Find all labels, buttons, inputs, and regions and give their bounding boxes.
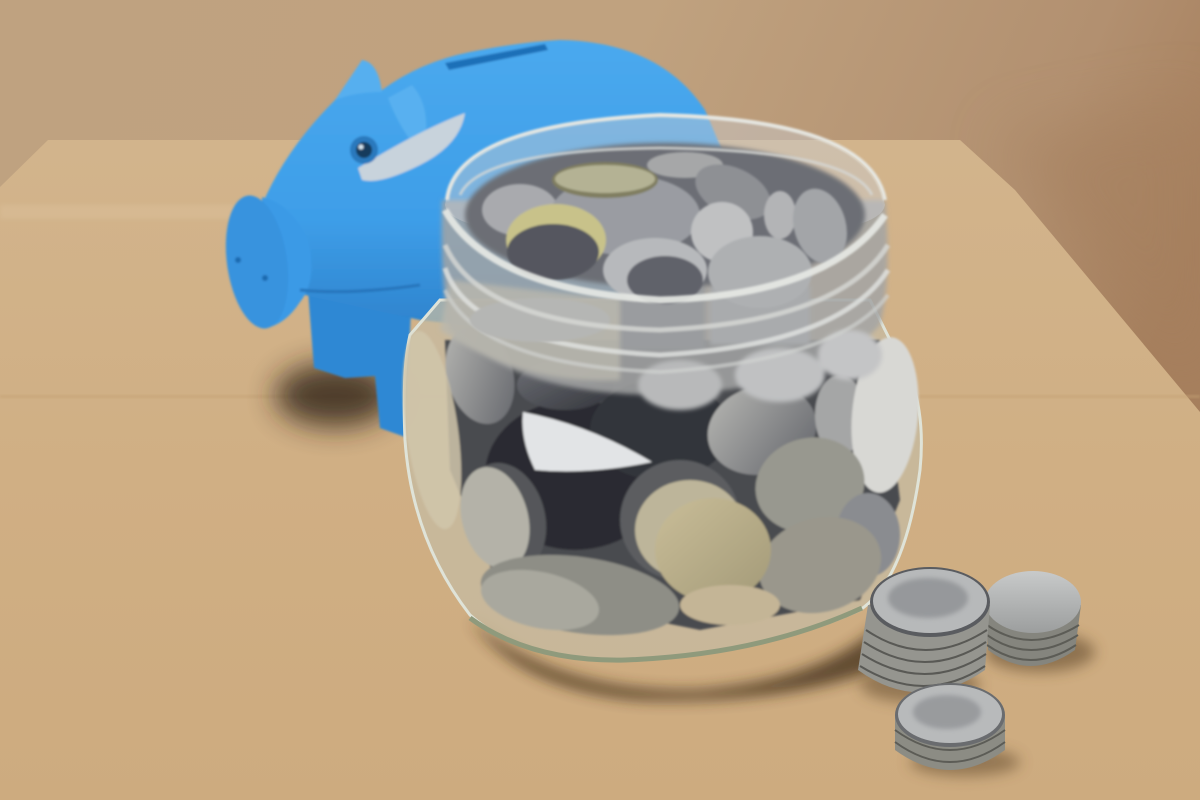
pig legs [308,290,412,437]
jar back rim glass [445,115,885,240]
pig eye [350,136,378,164]
piggy bank [218,40,722,437]
coins inside jar [392,318,925,647]
jar body [404,300,921,660]
coin stack: large centre [858,567,990,692]
coin stack: front [895,683,1005,770]
jar rim [445,115,888,330]
coin stack: right [985,571,1081,666]
jar opening [465,143,865,287]
pig coin slot [445,44,548,70]
pig ear left [335,60,382,100]
jar neck [440,200,888,410]
pig face highlight [358,113,465,181]
coins at top of jar [470,152,855,342]
pig snout [218,191,312,333]
pig body [262,40,722,340]
coin stacks [858,567,1081,770]
glass jar [392,115,925,660]
pig ear right [388,85,426,155]
shadows [275,363,1095,776]
